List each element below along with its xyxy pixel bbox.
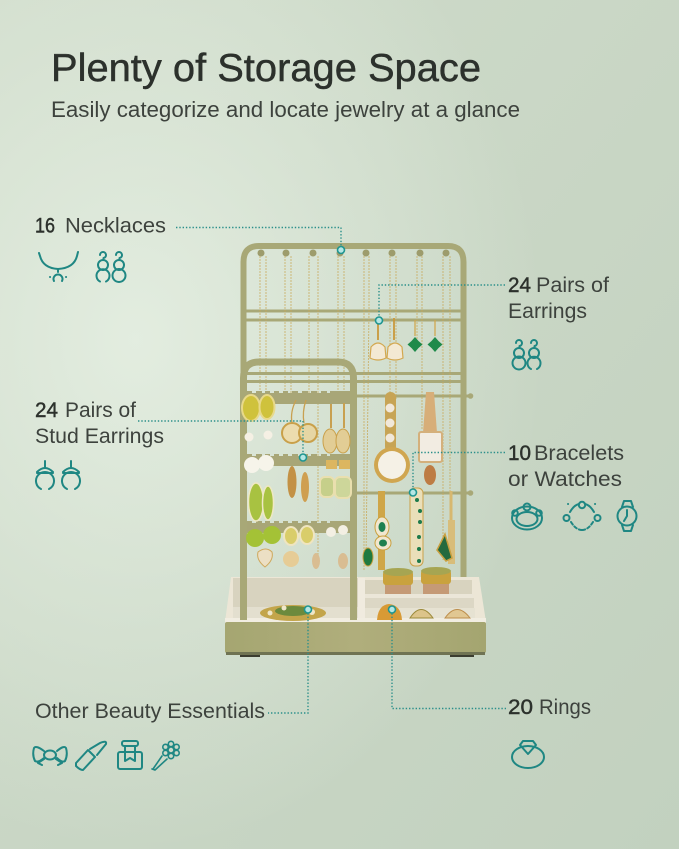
- icon: beaded bracelet: [564, 502, 600, 530]
- callout line: beauty essentials: [268, 606, 312, 713]
- label: 24 pairs of earrings: [508, 274, 609, 323]
- comb shelves: [247, 391, 350, 533]
- label: 24 pairs of earrings: Pairs of: [536, 274, 609, 297]
- icon: stud earrings: [36, 461, 80, 489]
- label: 24 pairs of stud earrings: [35, 399, 164, 448]
- label: 24 pairs of earrings: 24: [508, 274, 531, 297]
- icon: lipstick: [76, 742, 106, 770]
- hanging earrings: [370, 318, 442, 360]
- callout line: bracelets: [410, 452, 505, 496]
- necklace pegs and chains: [258, 250, 450, 570]
- label: 10 bracelets or watches: 10: [508, 442, 531, 465]
- label: 20 rings: 20: [508, 696, 533, 719]
- icon: bow: [33, 747, 67, 765]
- icon: watch: [618, 501, 636, 531]
- icon: ring: [512, 741, 544, 768]
- callout line: rings: [388, 606, 506, 708]
- stud earrings top row: [242, 395, 350, 453]
- label: 10 bracelets or watches: Bracelets: [534, 442, 624, 465]
- stud earrings bottom row: [246, 525, 348, 569]
- subtitle: Easily categorize and locate jewelry at a glance: [51, 97, 520, 122]
- label: 20 rings: [508, 696, 591, 719]
- tray jewelry: [260, 604, 470, 621]
- icon: earrings: [512, 340, 540, 370]
- label: 24 pairs of stud earrings: Stud Earrings: [35, 425, 164, 448]
- label: 10 bracelets or watches: or Watches: [508, 468, 622, 491]
- icon: necklace: [39, 252, 78, 281]
- bracelets and watches: [363, 392, 455, 570]
- label: 24 pairs of earrings: Earrings: [508, 300, 587, 323]
- icon: drop earrings: [97, 252, 126, 282]
- label: other beauty essentials: Other Beauty Essentials: [35, 700, 265, 723]
- callout line: pairs of earrings: [376, 285, 505, 324]
- label: 16 necklaces: 16: [35, 214, 55, 238]
- label: 16 necklaces: Necklaces: [65, 214, 166, 238]
- stud earrings middle row: [244, 455, 351, 521]
- label: 24 pairs of stud earrings: 24: [35, 399, 58, 422]
- icon: perfume: [118, 741, 142, 769]
- icon: bangle: [512, 504, 542, 530]
- jewelry stand illustration: [225, 246, 486, 657]
- back frame: [244, 246, 473, 600]
- title: Plenty of Storage Space: [51, 47, 481, 90]
- front frame: [244, 362, 354, 620]
- label: 24 pairs of stud earrings: Pairs of: [65, 399, 136, 422]
- callout line: stud earrings: [138, 421, 306, 461]
- label: 20 rings: Rings: [539, 696, 591, 719]
- tray: [225, 577, 486, 657]
- icon: flower pin: [152, 741, 179, 770]
- callout line: necklaces: [176, 228, 344, 254]
- jars: [383, 567, 451, 594]
- label: 10 bracelets or watches: [508, 442, 624, 491]
